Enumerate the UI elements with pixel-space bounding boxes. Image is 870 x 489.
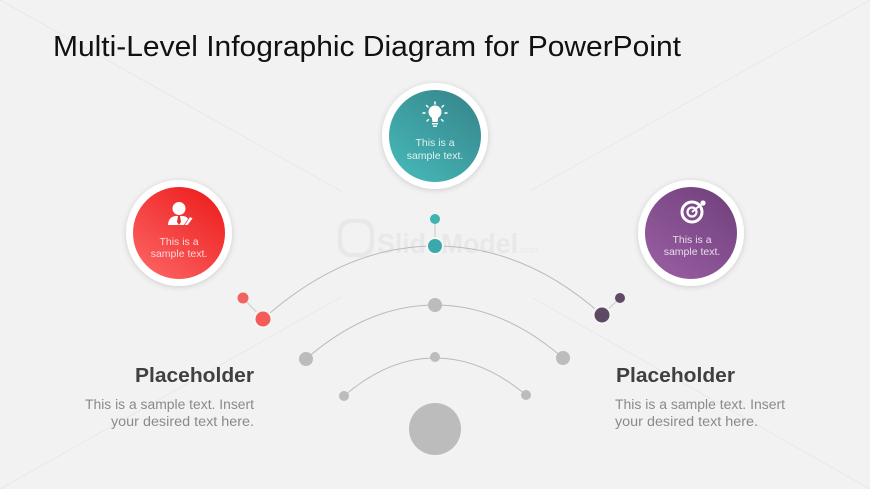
text: red badge: sample text.: [151, 248, 207, 260]
arc: middle level: [306, 305, 563, 359]
text: purple badge: sample text.: [664, 246, 720, 258]
text: left description: This is a sample text. Insert: [85, 397, 254, 412]
panel: red badge: [126, 180, 232, 286]
arc: inner level: [344, 358, 526, 396]
watermark: [340, 221, 538, 259]
node: teal pair: [426, 214, 444, 255]
text: purple badge: This is a: [672, 234, 712, 246]
text: left description: [85, 397, 254, 429]
text: red badge: This is a: [159, 236, 199, 248]
heading: left placeholder: Placeholder: [135, 365, 254, 387]
title: Multi-Level Infographic Diagram for PowerPoint: [53, 31, 681, 63]
node: red pair: [238, 292, 272, 328]
text: teal badge: sample text.: [407, 150, 463, 162]
icon: light bulb: [423, 102, 447, 127]
text: teal badge: This is a: [415, 137, 455, 149]
text: left description: your desired text here.: [111, 414, 254, 429]
icon: person with check: [168, 202, 192, 225]
arc: outer level: [263, 246, 602, 319]
text: right description: This is a sample text. Insert: [615, 397, 785, 412]
panel: teal badge: [382, 83, 488, 189]
nodes: inner level: [339, 352, 531, 401]
connectors: outer nodes: [243, 219, 620, 319]
icon: target: [682, 200, 706, 222]
node: purple pair: [592, 293, 625, 324]
text: right description: your desired text here.: [615, 414, 758, 429]
base circle: [409, 403, 461, 455]
watermark: .com: [518, 245, 538, 255]
nodes: middle level: [299, 298, 570, 366]
panel: purple badge: [638, 180, 744, 286]
text: right description: [615, 397, 785, 429]
heading: right placeholder: Placeholder: [616, 365, 735, 387]
watermark: SlideModel: [377, 228, 518, 259]
